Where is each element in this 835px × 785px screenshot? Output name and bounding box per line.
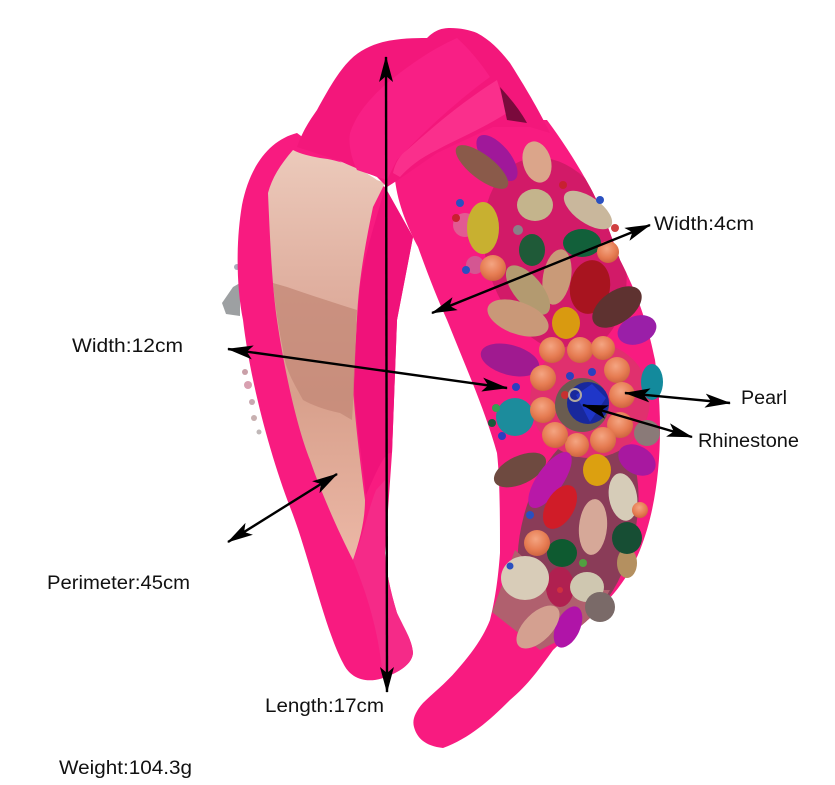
inner fold [354,187,413,495]
label: width 4cm: Width:4cm [654,214,754,235]
arrow: width 12cm [228,349,507,388]
knot [297,28,550,187]
label: rhinestone: Rhinestone [698,431,799,452]
arrow: length [386,57,387,692]
back band of headband [238,133,413,680]
label: width 12cm: Width:12cm [72,336,183,357]
knot shadow [500,87,527,123]
arrow: width 4cm [432,225,650,313]
label: weight: Weight:104.3g [59,758,192,779]
lining shadow [273,283,357,420]
arrow: perimeter [228,474,337,542]
central pearls and rhinestone [477,336,663,482]
front band of headband [395,120,660,748]
arrow: pearl [625,393,730,403]
lining [268,150,385,560]
upper jewels [449,128,661,350]
cluster base [453,139,659,650]
label: perimeter: Perimeter:45cm [47,573,190,594]
back gems peeking out [222,264,262,434]
label: length: Length:17cm [265,696,384,717]
arrow: rhinestone [583,405,692,437]
label: pearl: Pearl [741,388,787,409]
gem cluster [449,128,663,656]
lower jewels [489,445,648,656]
